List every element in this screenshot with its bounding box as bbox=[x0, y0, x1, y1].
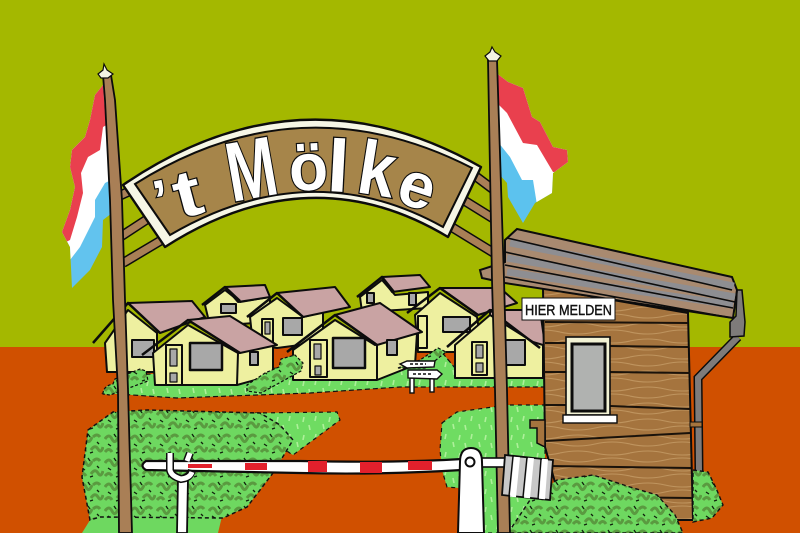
houses group bbox=[93, 275, 545, 385]
grass strip under the houses bbox=[103, 350, 545, 398]
sign lettering: k bbox=[352, 126, 402, 215]
house: front right bbox=[447, 310, 545, 378]
small bush at hut bbox=[693, 470, 723, 522]
sign lettering: ’ bbox=[147, 167, 176, 232]
signpost bbox=[400, 361, 442, 393]
grass patch right bbox=[440, 405, 545, 533]
sign lettering: M bbox=[219, 119, 284, 220]
arch sign frame bbox=[123, 120, 481, 247]
barrier main post bbox=[458, 448, 484, 533]
left pole finial bbox=[98, 64, 113, 78]
left flag bbox=[62, 85, 110, 288]
grass under left bush bbox=[82, 512, 223, 533]
counterweight arm bbox=[480, 458, 506, 467]
arch sign bbox=[123, 119, 481, 247]
grass patch beside left bush bbox=[255, 412, 340, 455]
sky background bbox=[0, 0, 800, 347]
front bush at hut bbox=[508, 475, 683, 533]
ground background bbox=[0, 347, 800, 533]
hut sign bbox=[522, 298, 615, 320]
barrier boom bbox=[142, 459, 462, 474]
house: back left small bbox=[202, 285, 270, 326]
sign lettering: l bbox=[325, 125, 351, 209]
hut wall bbox=[543, 288, 693, 520]
hut sign: HIER MELDEN bbox=[525, 302, 612, 319]
right flag bbox=[498, 74, 568, 223]
house: back right small bbox=[357, 275, 430, 312]
hut ledge bbox=[530, 420, 545, 447]
hut planks bbox=[544, 322, 692, 498]
house: centre back bbox=[247, 287, 350, 348]
left bush bbox=[82, 410, 293, 520]
bush and grass left bbox=[82, 410, 340, 533]
sign lettering bbox=[147, 119, 446, 233]
hut bbox=[480, 229, 745, 533]
sign struts bbox=[117, 175, 494, 263]
barrier pivot bbox=[466, 458, 474, 466]
house: far left bbox=[93, 301, 205, 372]
right pole finial bbox=[485, 47, 501, 61]
arch sign panel bbox=[135, 128, 472, 235]
left pole bbox=[98, 64, 132, 533]
hut window bbox=[563, 337, 617, 423]
small hedges by the houses bbox=[103, 348, 446, 395]
barrier rest post bbox=[177, 478, 188, 533]
gutter bbox=[690, 290, 745, 471]
sign lettering: e bbox=[390, 146, 446, 225]
house: front left bbox=[142, 316, 277, 385]
barrier bbox=[142, 448, 553, 533]
hut roof bbox=[480, 229, 737, 318]
barrier fork bbox=[170, 453, 192, 479]
counterweight bbox=[502, 455, 553, 500]
house: right back bbox=[407, 288, 517, 352]
right pole bbox=[485, 47, 510, 533]
barrier red bands bbox=[188, 461, 432, 473]
sign lettering: t bbox=[164, 154, 210, 233]
house: front centre bbox=[287, 303, 422, 380]
sign lettering: ö bbox=[287, 129, 330, 205]
